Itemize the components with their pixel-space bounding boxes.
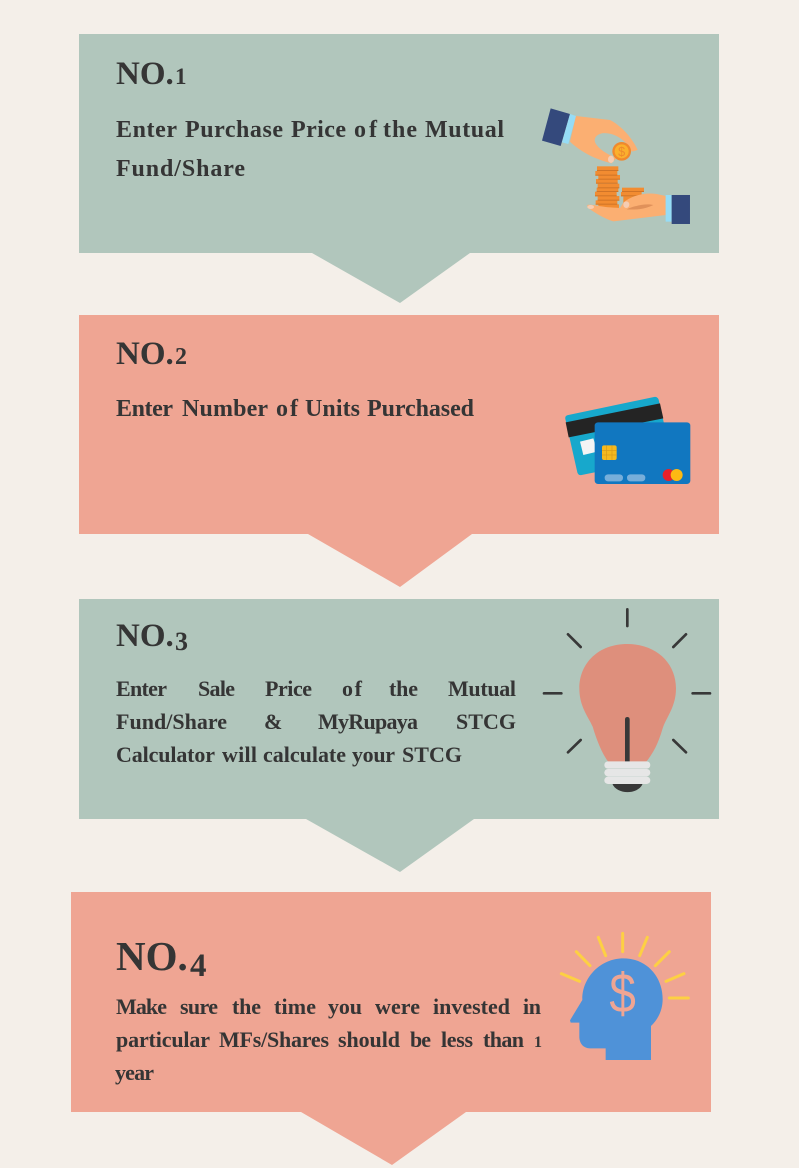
text: step 4 description: invested bbox=[433, 994, 510, 1019]
text: step 4 description: time bbox=[274, 994, 316, 1019]
icon: head with dollar sign: $ bbox=[609, 963, 636, 1025]
panel: step 3 bbox=[79, 599, 719, 872]
text: step 3 description: STCG bbox=[456, 709, 516, 734]
text: step 3 description: calculate bbox=[263, 742, 346, 767]
text: step 4 description bbox=[115, 994, 542, 1085]
text: step 4 description: 1 bbox=[534, 1034, 542, 1051]
text: step 4 description: particular bbox=[116, 1027, 210, 1052]
text: step 4 description: year bbox=[115, 1060, 154, 1085]
text: step 2 description: Number bbox=[182, 396, 268, 422]
heading: NO.2: NO. bbox=[116, 336, 174, 372]
panel 3 background with arrow bbox=[79, 599, 719, 872]
heading: NO.1: 1 bbox=[175, 64, 186, 89]
text: step 3 description: of bbox=[342, 676, 363, 701]
text: step 1 description: the bbox=[383, 117, 417, 143]
text: step 4 description: you bbox=[328, 994, 362, 1019]
heading: NO.4: 4 bbox=[190, 948, 206, 984]
text: step 3 description bbox=[116, 676, 516, 767]
panel: step 1 bbox=[79, 34, 719, 303]
text: step 3 description: Enter bbox=[116, 676, 167, 701]
text: step 1 description: Enter bbox=[116, 117, 177, 143]
text: step 3 description: MyRupaya bbox=[318, 709, 418, 734]
text: step 4 description: in bbox=[523, 994, 541, 1019]
heading: NO.4: NO. bbox=[116, 933, 188, 979]
text: step 2 description: Enter bbox=[116, 396, 173, 422]
text: step 3 description: will bbox=[222, 742, 257, 767]
text: step 4 description: should bbox=[338, 1027, 400, 1052]
panel: step 2 bbox=[79, 315, 719, 587]
heading: NO.1: NO. bbox=[116, 56, 174, 92]
icon: hands with coins: $ bbox=[618, 145, 625, 159]
text: step 3 description: Calculator bbox=[116, 742, 215, 767]
text: step 4 description: less bbox=[441, 1027, 473, 1052]
heading: NO.3: NO. bbox=[116, 618, 174, 654]
heading: NO.2: 2 bbox=[175, 344, 187, 370]
text: step 3 description: Fund/Share bbox=[116, 709, 227, 734]
icon: head with dollar sign bbox=[561, 933, 688, 1060]
text: step 3 description: & bbox=[264, 709, 282, 734]
icon: light bulb bbox=[544, 609, 710, 792]
text: step 4 description: the bbox=[232, 994, 261, 1019]
text: step 3 description: STCG bbox=[402, 742, 462, 767]
text: step 4 description: be bbox=[410, 1027, 431, 1052]
text: step 1 description: Price bbox=[291, 117, 346, 143]
text: step 4 description: Make bbox=[116, 994, 167, 1019]
icon: credit cards bbox=[565, 397, 690, 484]
panel 4 background with arrow bbox=[71, 892, 711, 1165]
panel 1 background with arrow bbox=[79, 34, 719, 303]
text: step 4 description: were bbox=[375, 994, 420, 1019]
panel: step 4 bbox=[71, 892, 711, 1165]
text: step 3 description: Sale bbox=[198, 676, 235, 701]
icon: hands with coins bbox=[542, 108, 690, 224]
text: step 3 description: the bbox=[389, 676, 418, 701]
text: step 1 description bbox=[116, 117, 504, 182]
text: step 3 description: Mutual bbox=[448, 676, 516, 701]
text: step 1 description: Mutual bbox=[425, 117, 504, 143]
text: step 4 description: than bbox=[483, 1027, 524, 1052]
text: step 1 description: of bbox=[354, 117, 378, 143]
text: step 2 description: Purchased bbox=[367, 396, 475, 422]
text: step 4 description: MFs/Shares bbox=[219, 1027, 329, 1052]
text: step 2 description: Units bbox=[305, 396, 360, 422]
heading: NO.3: 3 bbox=[175, 627, 188, 656]
text: step 1 description: Purchase bbox=[185, 117, 283, 143]
panel 2 background with arrow bbox=[79, 315, 719, 587]
text: step 4 description: sure bbox=[180, 994, 218, 1019]
text: step 2 description: of bbox=[276, 396, 299, 422]
text: step 3 description: your bbox=[352, 742, 395, 767]
text: step 1 description: Fund/Share bbox=[116, 156, 245, 182]
text: step 3 description: Price bbox=[265, 676, 312, 701]
